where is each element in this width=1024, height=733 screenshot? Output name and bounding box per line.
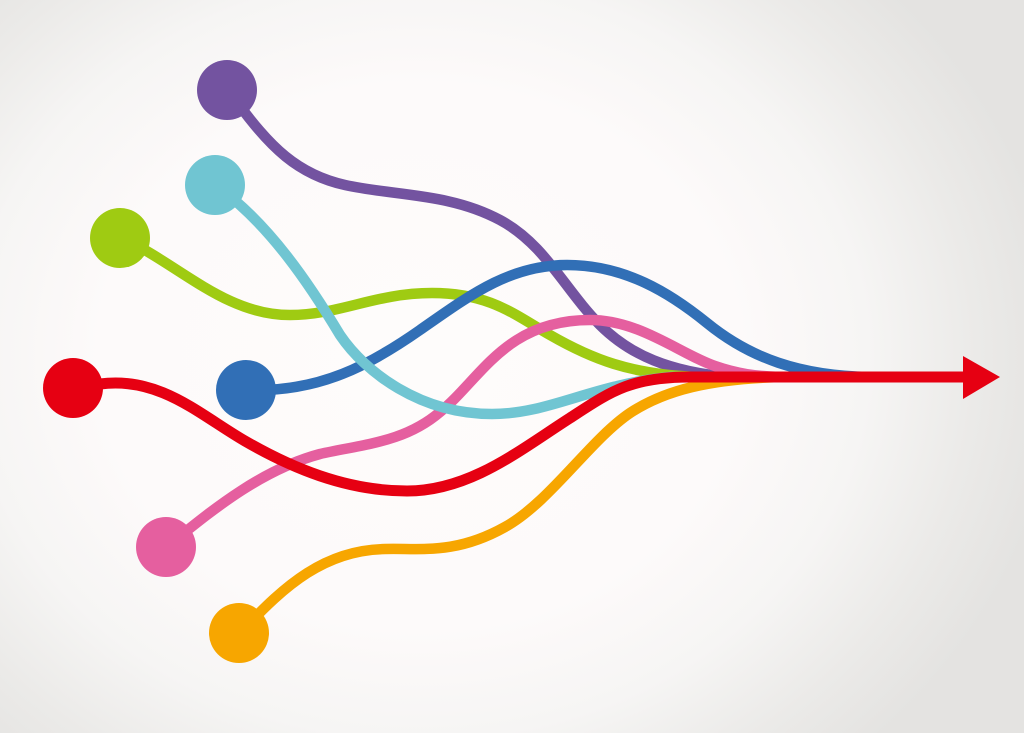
node: cyan [185,155,245,215]
path: light green [90,208,700,377]
path: red with arrow [43,356,1000,491]
path: orange [209,377,780,663]
node: red [43,358,103,418]
path: cyan [185,155,720,414]
path: purple [197,60,730,377]
arrowhead: red [963,356,1000,399]
node: pink [136,517,196,577]
path: pink [136,320,790,577]
node: orange [209,603,269,663]
path: blue [216,265,870,420]
node: blue [216,360,276,420]
node: purple [197,60,257,120]
node: light green [90,208,150,268]
